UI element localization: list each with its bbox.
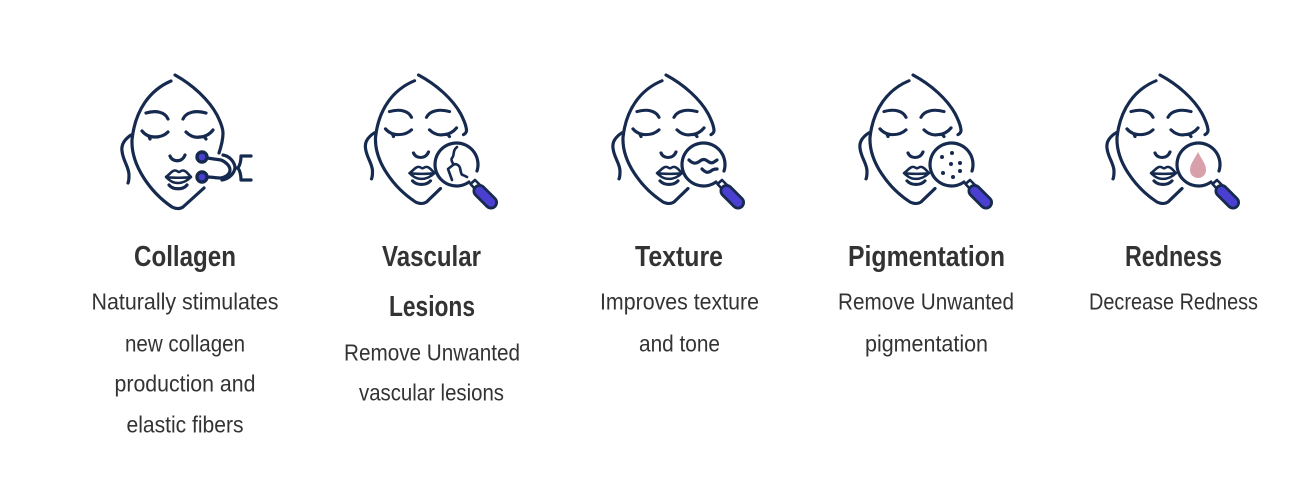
panel: Redness xyxy=(1089,75,1258,314)
icon: face with magnifier over veins xyxy=(365,75,491,203)
icon: face with magnifier over wrinkles xyxy=(613,75,738,203)
icon: face with magnifier over dots xyxy=(860,75,986,203)
text: Vascular Lesions description xyxy=(344,340,520,406)
text: Collagen description: production and xyxy=(114,370,256,396)
text: Texture description: and tone xyxy=(639,330,720,356)
text: Texture description xyxy=(600,288,759,356)
heading: Texture: Texture xyxy=(635,241,723,273)
text: Vascular Lesions description: Remove Unwanted xyxy=(344,340,520,366)
text: Texture description: Improves texture xyxy=(600,288,759,314)
heading: Vascular Lesions: Vascular xyxy=(382,241,481,273)
heading: Collagen: Collagen xyxy=(134,241,236,273)
panel: Collagen xyxy=(92,75,278,438)
text: Collagen description: new collagen xyxy=(125,330,245,356)
text: Collagen description: elastic fibers xyxy=(126,412,244,438)
text: Pigmentation description xyxy=(838,288,1014,356)
text: Pigmentation description: Remove Unwanted xyxy=(838,288,1014,314)
heading: Vascular Lesions xyxy=(382,241,481,323)
panel: Texture xyxy=(600,75,759,356)
heading: Pigmentation: Pigmentation xyxy=(848,241,1005,273)
text: Collagen description xyxy=(92,288,278,438)
panel: Pigmentation xyxy=(838,75,1014,356)
text: Vascular Lesions description: vascular lesions xyxy=(359,380,504,406)
icon: face with collagen roller xyxy=(122,75,251,208)
text: Redness description: Decrease Redness xyxy=(1089,288,1258,314)
heading: Redness: Redness xyxy=(1125,241,1222,273)
heading: Vascular Lesions: Lesions xyxy=(389,291,475,323)
panel: Vascular Lesions xyxy=(344,75,520,406)
text: Pigmentation description: pigmentation xyxy=(865,330,988,356)
icon: face with magnifier over red drop xyxy=(1107,75,1233,203)
text: Collagen description: Naturally stimulates xyxy=(92,288,278,314)
